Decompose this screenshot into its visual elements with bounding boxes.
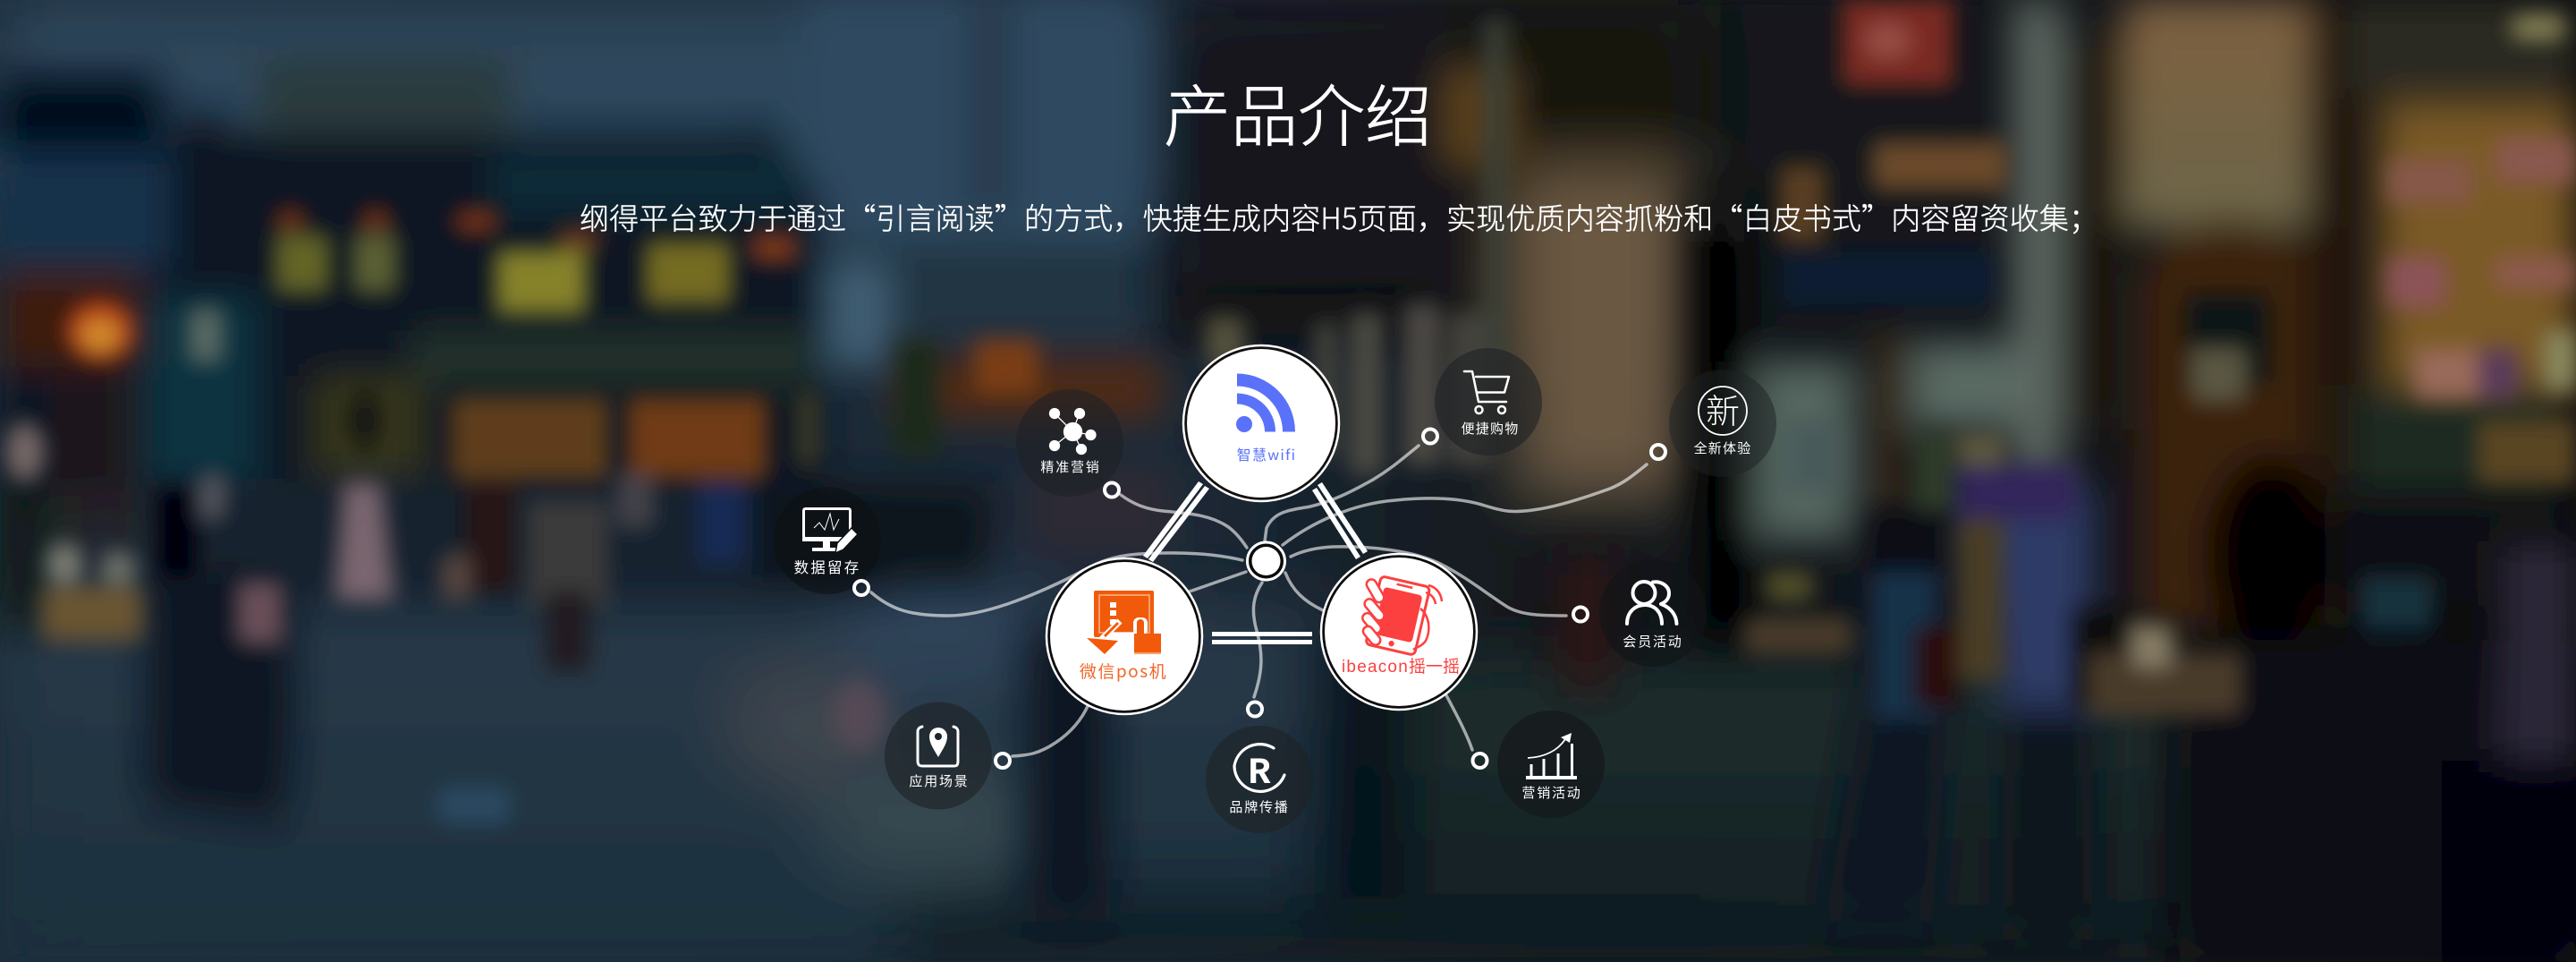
node: wechat pos (1046, 558, 1202, 714)
label: smart wifi: 智慧wifi (1237, 443, 1296, 464)
label: brand communication: 品牌传播 (1229, 797, 1290, 816)
center scene (894, 358, 1163, 421)
icon: monitor with chart and pen (802, 508, 858, 553)
icon: members (1627, 582, 1676, 624)
icon: phone in hand (1360, 576, 1442, 655)
icon: cart (1464, 371, 1509, 413)
label: application scenes: 应用场景 (909, 771, 970, 790)
icon: network nodes (1050, 408, 1096, 455)
label: easy shopping: 便捷购物 (1462, 419, 1519, 438)
people (335, 483, 394, 600)
node: ibeacon shake (1321, 554, 1477, 710)
lower windows (352, 394, 377, 447)
title: 产品介绍 (1164, 63, 1432, 160)
icon: location pin (918, 727, 958, 766)
label: member activities: 会员活动 (1623, 632, 1683, 651)
sky (805, 0, 1145, 242)
crowd band (152, 479, 894, 595)
connectors: curved lines linking hub to feature nodes (871, 446, 1647, 756)
feature: easy shopping (1435, 348, 1542, 455)
right scene (2012, 0, 2063, 483)
label: data retention: 数据留存 (794, 556, 860, 577)
node: smart wifi (1183, 345, 1339, 501)
icon: growth chart (1526, 733, 1577, 779)
subtitle text: 纲得平台致力于通过“引言阅读”的方式，快捷生成内容H5页面，实现优质内容抓粉和“白皮书式”内容留资收集； (580, 195, 2098, 238)
label: ibeacon shake: ibeacon摇一摇 (1342, 653, 1460, 677)
icon: wifi (1236, 374, 1295, 432)
label: marketing activities: 营销活动 (1521, 783, 1582, 802)
icon: registered R: R (1248, 752, 1271, 795)
icon: pos tablet and hands (1087, 591, 1161, 654)
feature: precision marketing (1016, 389, 1123, 497)
feature: member activities (1599, 559, 1707, 667)
label: precision marketing: 精准营销 (1040, 457, 1101, 476)
upper windows (275, 234, 329, 293)
tree tops (259, 58, 510, 134)
buildings left (0, 76, 823, 492)
label: wechat pos: 微信pos机 (1080, 659, 1167, 683)
double bars between main circles (1143, 481, 1368, 644)
right (1843, 0, 1952, 86)
hub node (1247, 542, 1284, 580)
feature: brand communication (1206, 726, 1313, 833)
feature: application scenes (885, 702, 992, 809)
feature: new experience (1669, 370, 1776, 477)
connector end rings (854, 430, 1665, 768)
icon: circled new: 新 (1706, 384, 1740, 433)
center (975, 340, 1038, 394)
feature: marketing activities (1497, 711, 1605, 818)
label: new experience: 全新体验 (1694, 438, 1751, 457)
planter (43, 586, 141, 640)
feature: data retention (774, 487, 881, 594)
